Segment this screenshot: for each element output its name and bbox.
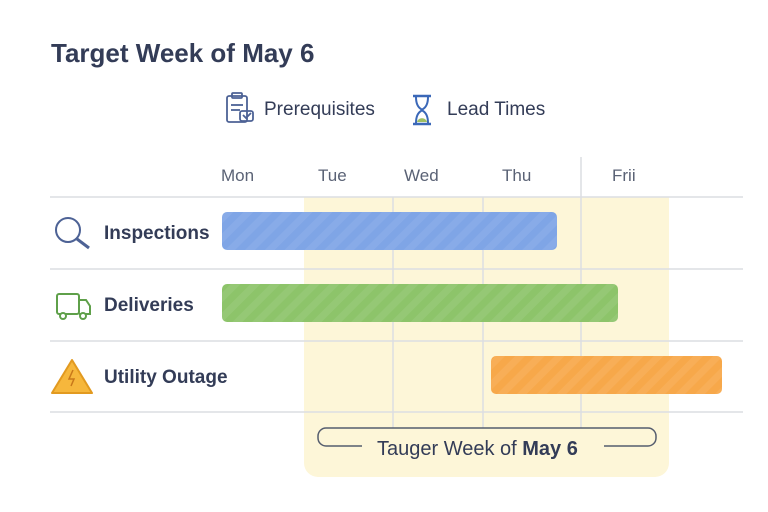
day labels: Thu [502,166,531,185]
text: Deliveries [104,295,194,316]
day labels [221,166,636,185]
day labels: Mon [221,166,254,185]
icon: warning [52,360,92,393]
row labels: Inspections [104,223,210,244]
title: Target Week of May 6 [51,38,314,68]
icon: truck [57,294,90,319]
bar: utility outage [491,356,722,394]
bracket [318,428,656,446]
highlight band [304,197,669,477]
text: Lead Times [447,99,545,120]
text: Utility Outage [104,367,228,388]
day labels: Frii [612,166,636,185]
bar: inspections [222,212,557,250]
day labels: Wed [404,166,439,185]
bar: deliveries [222,284,618,322]
icon: magnifier [56,218,89,248]
legend: Prerequisites [264,99,375,120]
day labels: Tue [318,166,347,185]
icon: hourglass [413,96,431,124]
icon: clipboard [227,93,253,122]
bracket label: Tauger Week of May 6 [377,438,578,460]
